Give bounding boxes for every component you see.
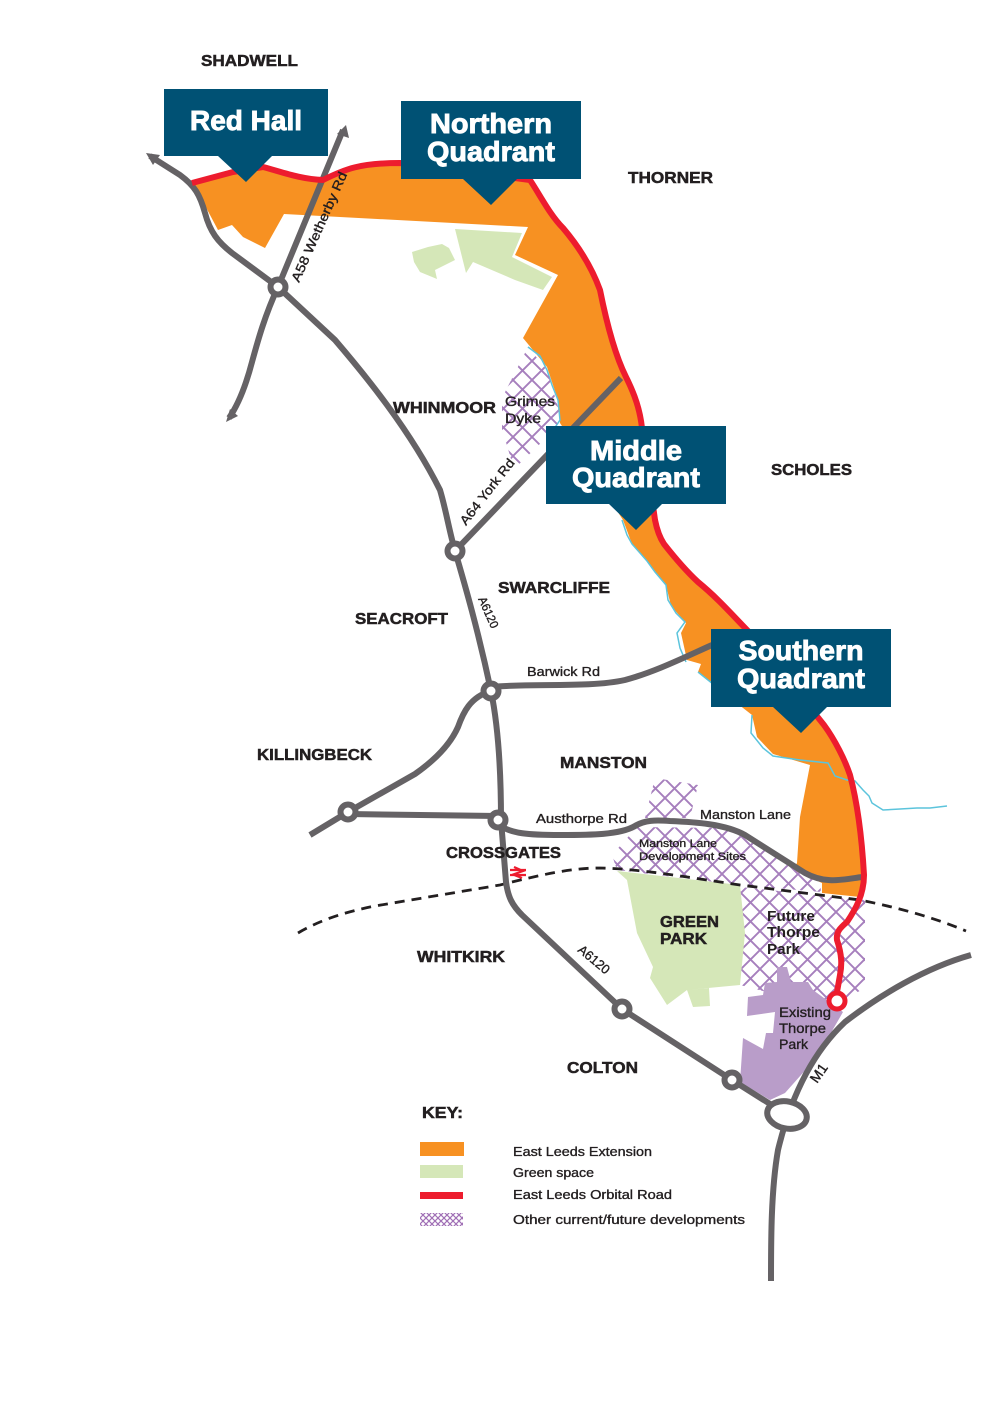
site and road labels: Dyke: [505, 410, 541, 426]
callout: Middle Quadrant: Middle: [590, 435, 682, 466]
callout: Northern Quadrant: Quadrant: [427, 136, 555, 167]
callout: Northern Quadrant: Northern: [430, 108, 552, 139]
callout: Middle Quadrant: [546, 426, 726, 530]
site and road labels: [288, 169, 831, 1086]
callout: Southern Quadrant: [711, 629, 891, 733]
place names: SCHOLES: [771, 462, 852, 479]
road arrowheads: [146, 125, 349, 422]
river: [528, 347, 947, 810]
place names: SEACROFT: [355, 611, 448, 628]
site and road labels: Park: [767, 941, 801, 958]
callout: Southern Quadrant: Quadrant: [737, 663, 865, 694]
place names: MANSTON: [560, 755, 647, 772]
site and road labels: Austhorpe Rd: [536, 811, 627, 826]
key: East Leeds Orbital Road: [513, 1187, 672, 1202]
place names: SHADWELL: [201, 53, 298, 70]
site and road labels: Existing: [779, 1004, 831, 1020]
East Leeds Orbital Road: [192, 163, 864, 992]
key: [420, 1105, 746, 1227]
icon: railway station: [510, 867, 526, 878]
site and road labels: A6120: [575, 942, 613, 977]
place names: [201, 53, 852, 1077]
Existing Thorpe Park area: [740, 967, 843, 1100]
key: Green space: [513, 1165, 594, 1180]
site and road labels: Future: [767, 908, 815, 925]
green space north: [412, 229, 552, 290]
site and road labels: Thorpe: [779, 1020, 826, 1036]
green space: Green Park: [617, 871, 745, 1007]
site and road labels: Thorpe: [767, 924, 820, 941]
place names: WHITKIRK: [417, 949, 505, 966]
callout: Middle Quadrant: Quadrant: [572, 462, 700, 493]
site and road labels: Manston Lane: [700, 807, 791, 822]
site and road labels: A64 York Rd: [457, 456, 518, 528]
key: KEY:: [422, 1105, 463, 1122]
site and road labels: A58 Wetherby Rd: [288, 169, 350, 284]
site and road labels: Park: [779, 1036, 809, 1052]
place names: CROSSGATES: [446, 845, 561, 862]
road network: [150, 130, 971, 1281]
site and road labels: A6120: [475, 595, 502, 631]
place names: THORNER: [628, 170, 713, 187]
key: East Leeds Extension: [513, 1144, 652, 1159]
site and road labels: Barwick Rd: [527, 664, 600, 679]
site and road labels: Development Sites: [639, 851, 747, 863]
site and road labels: M1: [806, 1060, 831, 1086]
place names: KILLINGBECK: [257, 747, 372, 764]
place names: PARK: [660, 931, 707, 948]
place names: SWARCLIFFE: [498, 580, 610, 597]
callout: Red Hall: Red Hall: [190, 105, 302, 136]
hatched development areas: [502, 347, 865, 1012]
place names: COLTON: [567, 1060, 638, 1077]
roundabouts: [270, 280, 809, 1132]
Thorpe Park junction: [829, 993, 845, 1009]
East Leeds Extension area: [193, 163, 865, 897]
callout: Red Hall: [164, 89, 328, 182]
place names: GREEN: [660, 914, 719, 931]
site and road labels: Grimes: [505, 393, 555, 409]
callout: Southern Quadrant: Southern: [738, 635, 864, 666]
dashed railway line: [298, 868, 966, 933]
place names: WHINMOOR: [393, 400, 496, 417]
site and road labels: Manston Lane: [639, 838, 717, 850]
callout: Northern Quadrant: [401, 101, 581, 205]
key: Other current/future developments: [513, 1212, 746, 1227]
